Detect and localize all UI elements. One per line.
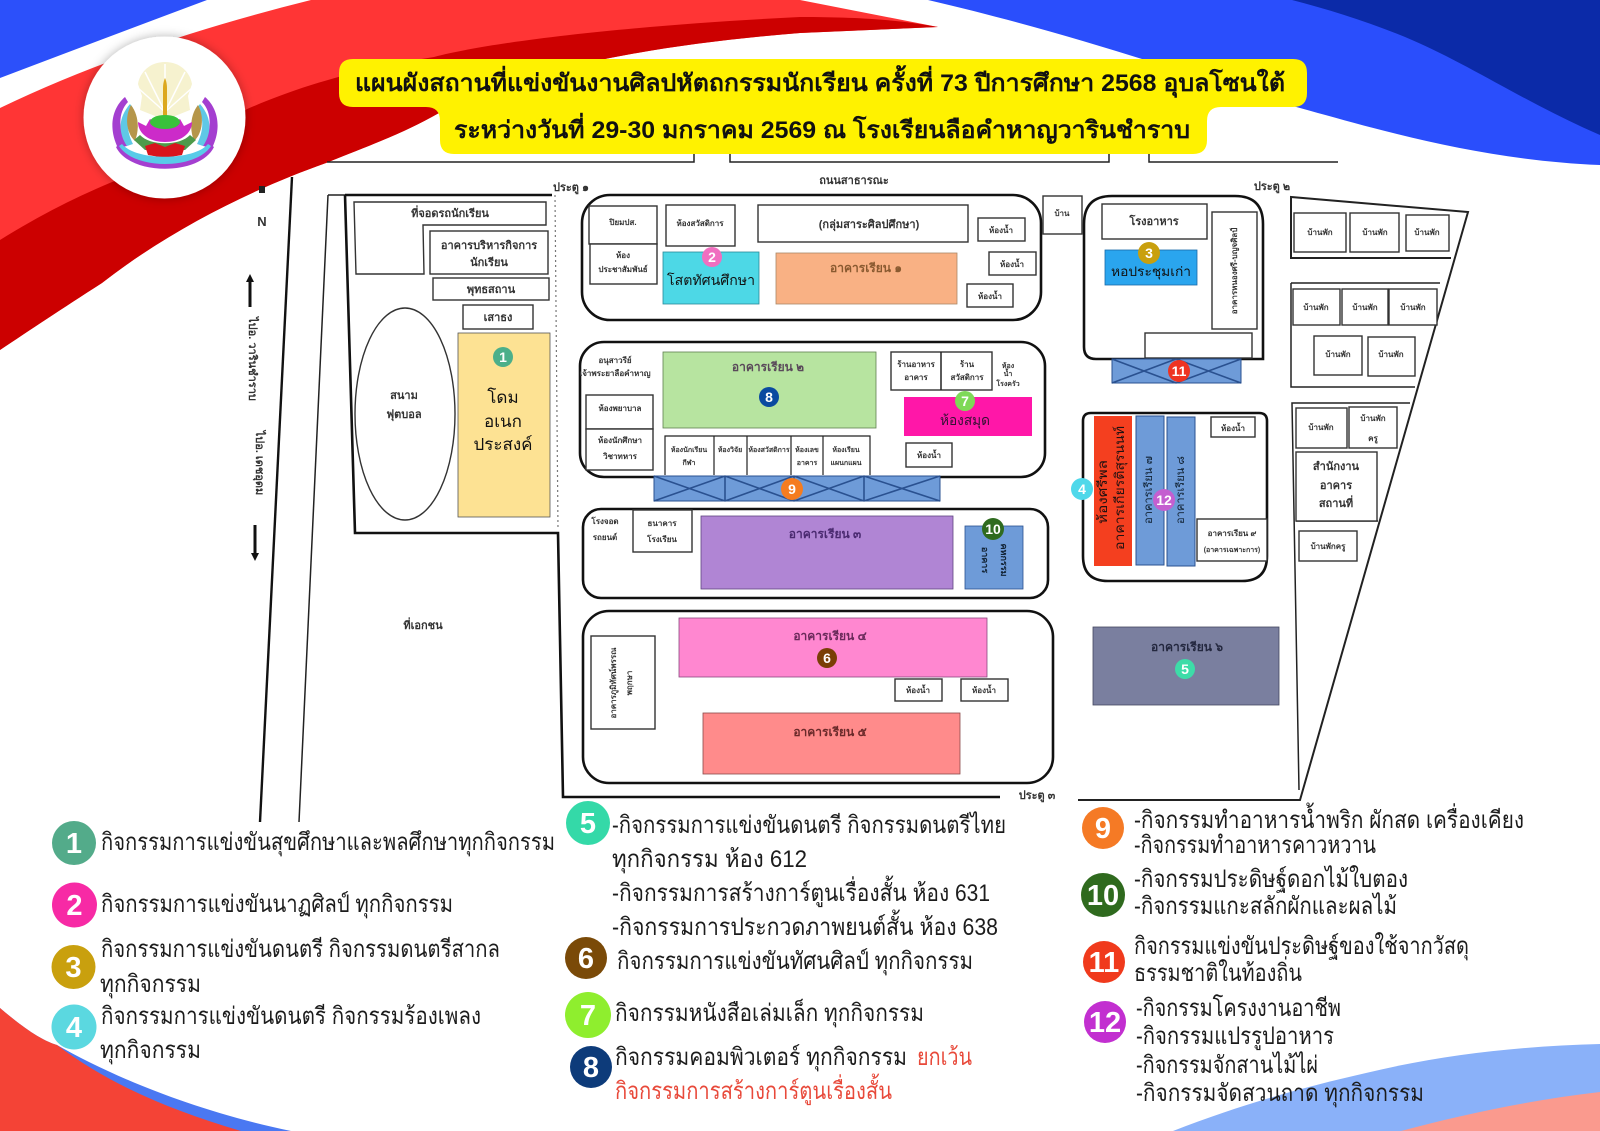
legend 11: ธรรมชาติในท้องถิ่น	[1134, 956, 1302, 987]
covered walkway 9: 9	[788, 481, 796, 497]
building 2: 8	[765, 389, 773, 405]
west zone: สนาม	[390, 390, 418, 402]
logo emblem	[112, 62, 218, 169]
block F: ห้องน้ำ	[906, 684, 930, 695]
building: Sripol room: ห้องศรีพล	[1095, 460, 1110, 524]
logo	[84, 36, 246, 198]
legend 3	[52, 936, 500, 999]
building 6: 5	[1181, 661, 1189, 677]
staff housing: บ้านพัก	[1360, 413, 1386, 423]
block D: ห้องสวัสดิการ	[748, 445, 790, 454]
building: multipurpose dome: 1	[499, 349, 507, 365]
building: multipurpose dome: โดม	[487, 387, 519, 407]
legend 9: -กิจกรรมทำอาหารคาวหวาน	[1134, 832, 1376, 859]
block B: โรงอาหาร	[1128, 214, 1179, 228]
staff housing: บ้านพักครู	[1311, 541, 1346, 552]
block C: (อาคารเฉพาะการ)	[1204, 547, 1260, 554]
block D: ร้าน	[960, 359, 975, 369]
covered walkway 11: 11	[1172, 363, 1187, 379]
building: multipurpose dome: ประสงค์	[473, 435, 533, 454]
building: old assembly hall: หอประชุมเก่า	[1111, 264, 1191, 280]
legend 2: 2	[66, 890, 83, 922]
home economics building: คหกรรม	[999, 543, 1009, 577]
marker 4: 4	[1078, 481, 1086, 497]
staff housing: บ้านพัก	[1414, 227, 1440, 237]
block D: ห้อง	[1002, 361, 1015, 370]
legend 11: 11	[1089, 947, 1119, 979]
block F	[583, 611, 1053, 783]
title line 2: ระหว่างวันที่ 29-30 มกราคม 2569 ณ โรงเรียนลือคำหาญวารินชำราบ	[454, 112, 1190, 144]
block D: วิชาทหาร	[603, 452, 638, 461]
legend 10: -กิจกรรมแกะสลักผักและผลไม้	[1134, 892, 1397, 920]
legend 7: กิจกรรมหนังสือเล่มเล็ก ทุกกิจกรรม	[615, 998, 924, 1028]
block A: ปิยมปส.	[609, 218, 637, 227]
block D: อนุสาวรีย์	[598, 355, 632, 366]
building 3: อาคารเรียน ๓	[789, 527, 861, 541]
building: multipurpose dome: อเนก	[484, 412, 522, 431]
legend 10: -กิจกรรมประดิษฐ์ดอกไม้ใบตอง	[1134, 865, 1408, 893]
title line 1: แผนผังสถานที่แข่งขันงานศิลปหัตถกรรมนักเรียน ครั้งที่ 73 ปีการศึกษา 2568 อุบลโซนใต้	[355, 64, 1285, 99]
staff housing: สำนักงาน	[1313, 460, 1360, 473]
staff housing: บ้านพัก	[1308, 422, 1334, 432]
building: multipurpose dome	[458, 333, 550, 517]
building 4: 6	[823, 650, 831, 666]
road and gate labels: ที่เอกชน	[403, 617, 443, 632]
block D: ห้องนักศึกษา	[598, 435, 642, 445]
staff housing: อาคาร	[1320, 480, 1352, 492]
library: 7	[961, 393, 969, 409]
west zone: ที่จอดรถนักเรียน	[411, 205, 489, 220]
legend 5: -กิจกรรมการสร้างการ์ตูนเรื่องสั้น ห้อง 631	[612, 875, 990, 908]
staff housing: สถานที่	[1319, 495, 1353, 510]
west zone: เสาธง	[484, 312, 512, 324]
library: ห้องสมุด	[940, 412, 990, 429]
block E: รถยนต์	[593, 532, 617, 542]
block D: ห้องเลข	[795, 445, 819, 454]
block D: กีฬา	[682, 459, 696, 467]
marker 4	[1071, 478, 1093, 500]
compass and direction labels: ไปอ. เดชอุดม	[252, 429, 267, 495]
building 1	[776, 253, 957, 304]
legend 9	[1082, 802, 1524, 859]
legend 4	[52, 1003, 481, 1065]
block D: สวัสดิการ	[950, 373, 984, 382]
building 4: อาคารเรียน ๔	[793, 629, 867, 643]
building: audiovisual room	[663, 247, 759, 304]
legend 12: 12	[1089, 1007, 1121, 1039]
legend 11	[1083, 932, 1469, 987]
block A	[582, 195, 1041, 320]
legend 8: 8	[583, 1052, 599, 1084]
block C: ห้องน้ำ	[1221, 422, 1245, 433]
legend 3: กิจกรรมการแข่งขันดนตรี กิจกรรมดนตรีสากล	[101, 936, 500, 963]
block C: อาคารเรียน ๙	[1208, 528, 1256, 538]
block E: ธนาคาร	[648, 519, 677, 528]
block E: โรงเรียน	[646, 534, 677, 544]
home economics building: อาคาร	[980, 547, 990, 573]
block D: น้ำ	[1004, 367, 1012, 378]
legend 12: -กิจกรรมแปรรูปอาหาร	[1136, 1023, 1334, 1051]
building 2	[663, 352, 876, 428]
legend 3: 3	[65, 952, 82, 984]
legend 6	[565, 937, 973, 979]
west zone: ฟุตบอล	[386, 408, 422, 422]
legend 1: 1	[66, 828, 82, 860]
legend 6: 6	[578, 943, 594, 975]
building: audiovisual room: โสตทัศนศึกษา	[667, 272, 755, 288]
legend 2: กิจกรรมการแข่งขันนาฏศิลป์ ทุกกิจกรรม	[101, 890, 453, 919]
building: Sripol room	[1094, 416, 1132, 566]
building 5	[703, 713, 960, 774]
road and gate labels: ประตู ๑	[553, 181, 589, 195]
legend 1	[52, 821, 555, 865]
legend 7	[565, 992, 924, 1038]
legend 5: ทุกกิจกรรม ห้อง 612	[612, 846, 807, 874]
legend 10: 10	[1087, 880, 1119, 912]
building 6: อาคารเรียน ๖	[1151, 640, 1223, 654]
building 2: อาคารเรียน ๒	[732, 360, 804, 374]
compass and direction labels: ไปอ. วารินชำราบ	[246, 315, 260, 401]
block B: อาคารหนองศรี-บญจศิลป์	[1229, 228, 1240, 314]
school map	[246, 154, 1468, 822]
building 5: อาคารเรียน ๕	[793, 725, 867, 739]
legend 4: กิจกรรมการแข่งขันดนตรี กิจกรรมร้องเพลง	[101, 1003, 481, 1030]
legend 8: กิจกรรมการสร้างการ์ตูนเรื่องสั้น	[615, 1073, 892, 1106]
legend 12: -กิจกรรมโครงงานอาชีพ	[1136, 994, 1341, 1022]
legend 4: 4	[66, 1012, 82, 1044]
building 4	[679, 618, 987, 677]
legend 5: -กิจกรรมการประกวดภาพยนต์สั้น ห้อง 638	[612, 909, 998, 941]
staff housing: บ้านพัก	[1400, 302, 1426, 312]
legend 3: ทุกกิจกรรม	[100, 971, 201, 999]
legend 12	[1084, 994, 1424, 1108]
block D: ห้องเรียน	[832, 445, 860, 454]
title banner	[339, 59, 1307, 154]
block D: เจ้าพระยาลือคำหาญ	[579, 368, 651, 379]
block D: แผนกแผน	[830, 460, 862, 467]
block A: ประชาสัมพันธ์	[598, 264, 648, 274]
block D: อาคาร	[904, 373, 928, 382]
legend 5: 5	[580, 808, 596, 840]
legend 4: ทุกกิจกรรม	[100, 1037, 201, 1065]
legend 11: กิจกรรมแข่งขันประดิษฐ์ของใช้จากวัสดุ	[1134, 932, 1469, 961]
block B	[1043, 196, 1263, 359]
staff housing: บ้านพัก	[1362, 227, 1388, 237]
road and gate labels: ประตู ๓	[1019, 789, 1056, 803]
buildings 7 and 8: อาคารเรียน ๘	[1174, 456, 1187, 524]
home economics building	[965, 518, 1023, 589]
block A: ห้องน้ำ	[1000, 258, 1024, 269]
home economics building: 10	[985, 521, 1001, 537]
legend 8: กิจกรรมคอมพิวเตอร์ ทุกกิจกรรม	[615, 1043, 907, 1072]
block F: พฤกษา	[625, 671, 634, 695]
legend 5: -กิจกรรมการแข่งขันดนตรี กิจกรรมดนตรีไทย	[612, 811, 1006, 839]
legend 12: -กิจกรรมจัดสวนถาด ทุกกิจกรรม	[1136, 1080, 1424, 1108]
building: old assembly hall: 3	[1145, 245, 1153, 261]
block E: โรงจอด	[590, 516, 619, 526]
west zone: นักเรียน	[470, 256, 508, 269]
block D: ร้านอาหาร	[897, 359, 936, 369]
legend 9: 9	[1095, 813, 1111, 845]
staff housing: บ้านพัก	[1303, 302, 1329, 312]
block D: อาคาร	[797, 460, 817, 467]
staff housing: บ้านพัก	[1352, 302, 1378, 312]
block A: ห้องน้ำ	[989, 224, 1013, 235]
staff housing: บ้านพัก	[1307, 227, 1333, 237]
legend 5	[566, 801, 1006, 941]
block A: (กลุ่มสาระศิลปศึกษา)	[819, 218, 920, 232]
block C	[1083, 413, 1267, 581]
block F: อาคารภูมิทัศน์พรรณ	[608, 647, 619, 719]
block F: ห้องน้ำ	[972, 684, 996, 695]
west zone: อาคารบริหารกิจการ	[441, 239, 537, 252]
block D: โรงครัว	[995, 379, 1020, 388]
building: old assembly hall	[1105, 242, 1197, 285]
building 6	[1093, 627, 1279, 705]
covered walkway 9	[654, 476, 940, 501]
road and gate labels: ประตู ๒	[1254, 180, 1290, 194]
block A: ห้องน้ำ	[978, 290, 1002, 301]
block A: ห้อง	[616, 250, 630, 260]
legend 6: กิจกรรมการแข่งขันทัศนศิลป์ ทุกกิจกรรม	[617, 947, 973, 976]
block A: ห้องสวัสดิการ	[676, 218, 724, 228]
legend 10	[1081, 865, 1408, 920]
covered walkway 11	[1112, 359, 1241, 383]
compass and direction labels: N	[257, 214, 267, 229]
legend 9: -กิจกรรมทำอาหารน้ำพริก ผักสด เครื่องเคียง	[1134, 802, 1524, 834]
building: audiovisual room: 2	[708, 249, 716, 265]
library	[904, 391, 1032, 436]
buildings 7 and 8: อาคารเรียน ๗	[1142, 456, 1155, 524]
buildings 7 and 8: 12	[1156, 492, 1172, 508]
roads and boundaries	[260, 154, 1468, 822]
legend 7: 7	[580, 1000, 596, 1032]
block D: ห้องน้ำ	[917, 449, 941, 460]
compass and direction labels	[246, 186, 267, 561]
staff housing: บ้านพัก	[1378, 349, 1404, 359]
legend 1: กิจกรรมการแข่งขันสุขศึกษาและพลศึกษาทุกกิจกรรม	[101, 829, 555, 857]
staff housing	[1293, 213, 1449, 561]
building: Sripol room: อาคารเกียรติสุรนนท์	[1112, 426, 1128, 550]
building 1: อาคารเรียน ๑	[830, 261, 902, 275]
block D: ห้องพยาบาล	[599, 403, 642, 413]
legend 8	[570, 1043, 972, 1106]
west zone	[354, 202, 549, 520]
block D	[579, 342, 1045, 477]
road and gate labels: ถนนสาธารณะ	[819, 175, 889, 187]
block B: บ้าน	[1054, 208, 1070, 218]
legend 8: ยกเว้น	[917, 1044, 972, 1071]
legend 12: -กิจกรรมจักสานไม้ไผ่	[1136, 1051, 1318, 1079]
staff housing: ครู	[1368, 434, 1379, 444]
west zone: พุทธสถาน	[467, 284, 516, 297]
road and gate labels	[403, 175, 1290, 803]
legend 2	[52, 882, 453, 928]
building 3	[701, 516, 953, 589]
staff housing: บ้านพัก	[1325, 349, 1351, 359]
buildings 7 and 8	[1136, 416, 1195, 566]
block D: ห้องนักเรียน	[671, 445, 707, 454]
block E	[583, 509, 1048, 598]
block D: ห้องวิจัย	[718, 445, 742, 454]
